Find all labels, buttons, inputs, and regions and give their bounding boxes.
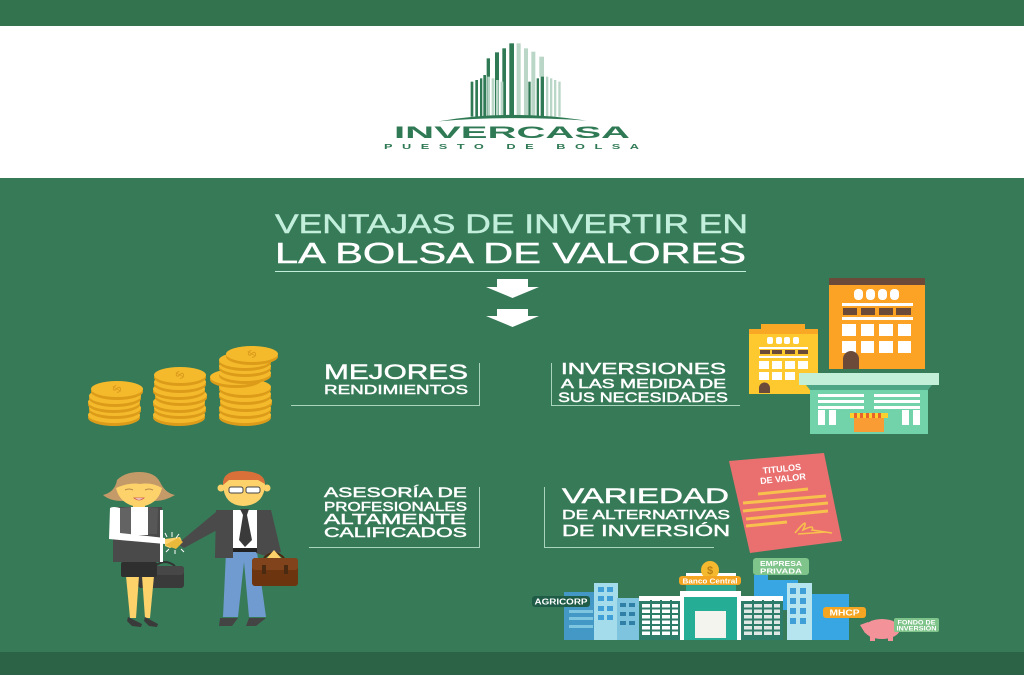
text block: inversiones a la medida: A LAS MEDIDA DE bbox=[561, 376, 726, 391]
text block: asesoria: PROFESIONALES bbox=[324, 499, 467, 514]
text block: variedad: DE INVERSIÓN bbox=[562, 521, 730, 540]
label: MHCP bbox=[823, 607, 866, 618]
arrow: second down arrow bbox=[486, 309, 539, 327]
text block: asesoria bbox=[309, 484, 480, 548]
icon: titulos de valor document bbox=[729, 453, 842, 553]
central bank bbox=[639, 573, 783, 640]
icon: buildings bbox=[749, 278, 939, 434]
text block: mejores rendimientos: RENDIMIENTOS bbox=[324, 382, 468, 397]
label: Empresa Privada: PRIVADA bbox=[760, 568, 802, 576]
illustration: financial district bbox=[532, 558, 939, 641]
logo: Invercasa bbox=[384, 43, 640, 151]
label: MHCP: MHCP bbox=[830, 608, 860, 618]
icon: piggy bank bbox=[860, 619, 900, 641]
icon: logo buildings bbox=[438, 43, 587, 121]
icon: titulos de valor document: TITULOS bbox=[762, 462, 802, 476]
text block: asesoria: ALTAMENTE bbox=[324, 511, 466, 528]
icon: gold coin stacks bbox=[88, 346, 278, 426]
label: Fondo de Inversion: INVERSIÓN bbox=[896, 624, 936, 632]
coin icon bbox=[701, 561, 719, 579]
text block: variedad: VARIEDAD bbox=[562, 485, 729, 508]
woman's briefcase bbox=[138, 562, 184, 588]
woman bbox=[103, 472, 183, 627]
text block: asesoria: ASESORÍA DE bbox=[324, 484, 467, 500]
label: Fondo de Inversion bbox=[894, 618, 939, 632]
icon: titulos de valor document: DE VALOR bbox=[760, 471, 807, 486]
title: LA BOLSA DE VALORES bbox=[275, 238, 746, 270]
text block: mejores rendimientos: MEJORES bbox=[324, 361, 468, 384]
label: Banco Central: Banco Central bbox=[682, 576, 738, 586]
yellow building bbox=[749, 324, 818, 394]
title: VENTAJAS DE INVERTIR EN bbox=[275, 209, 748, 239]
coin icon: $ bbox=[707, 565, 713, 577]
icon: gold coin stacks: $ bbox=[109, 382, 125, 395]
back buildings bbox=[564, 575, 849, 640]
text block: asesoria: CALIFICADOS bbox=[324, 524, 467, 540]
illustration: woman and man shaking hands bbox=[103, 471, 298, 627]
handshake sparkles bbox=[165, 532, 184, 554]
text block: mejores rendimientos bbox=[291, 361, 480, 406]
logo tagline: PUESTO DE BOLSA bbox=[384, 143, 640, 151]
icon: gold coin stacks: $ bbox=[172, 368, 188, 381]
mint store bbox=[799, 373, 939, 434]
icon: gold coin stacks: $ bbox=[244, 347, 260, 360]
man bbox=[165, 471, 281, 626]
text block: inversiones a la medida: SUS NECESIDADES bbox=[558, 390, 728, 405]
label: Empresa Privada: EMPRESA bbox=[760, 561, 802, 568]
text block: inversiones a la medida: INVERSIONES bbox=[561, 361, 726, 378]
label: Fondo de Inversion: FONDO DE bbox=[898, 620, 936, 626]
text block: variedad bbox=[544, 485, 730, 548]
arrow: first down arrow bbox=[486, 279, 539, 298]
orange building bbox=[829, 278, 925, 369]
label: Agricorp: AGRICORP bbox=[534, 598, 588, 606]
text block: inversiones a la medida bbox=[552, 361, 740, 406]
label: Agricorp bbox=[532, 596, 590, 607]
logo wordmark: INVERCASA bbox=[394, 123, 630, 142]
label: Empresa Privada bbox=[753, 558, 809, 576]
man's briefcase bbox=[252, 550, 298, 586]
title bbox=[275, 209, 748, 272]
text block: variedad: DE ALTERNATIVAS bbox=[562, 507, 730, 522]
